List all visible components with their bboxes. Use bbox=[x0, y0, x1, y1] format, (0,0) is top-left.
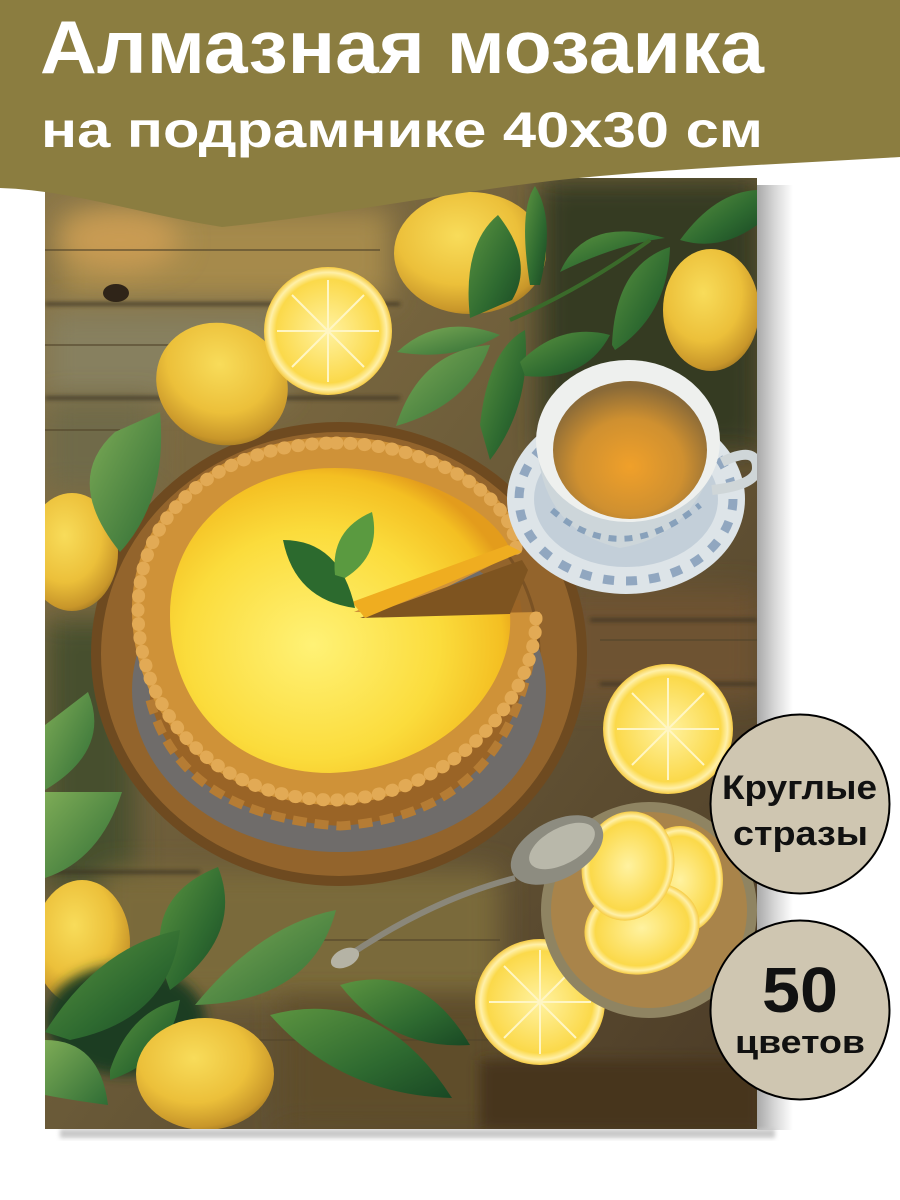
badge: 50 colours: цветов bbox=[735, 1024, 865, 1060]
lemon: left whole bbox=[156, 322, 288, 446]
lemon slice: top bbox=[264, 267, 392, 395]
lemon slice: bottom bbox=[475, 939, 605, 1065]
badge: round rhinestones bbox=[710, 714, 890, 894]
lemon: top right bbox=[663, 249, 759, 371]
bowl with lemon slices bbox=[541, 802, 757, 1018]
saucer bbox=[507, 436, 745, 594]
cut slice gap bbox=[360, 560, 528, 618]
dark foliage behind bottom sprig bbox=[45, 965, 205, 1075]
leaves: top sprig bbox=[396, 186, 757, 460]
badge: 50 colours bbox=[710, 920, 890, 1100]
cut slice bbox=[352, 545, 522, 618]
lemon: left edge bbox=[45, 493, 118, 611]
badge: round rhinestones: Круглые bbox=[722, 769, 877, 807]
wooden board bbox=[91, 422, 587, 886]
badge: round rhinestones: стразы bbox=[733, 815, 868, 853]
banner subtitle: на подрамнике 40х30 см bbox=[41, 102, 763, 158]
lemon: top centre bbox=[394, 192, 546, 314]
leaf: left of tart bbox=[90, 412, 161, 552]
plate bbox=[132, 571, 546, 852]
teacup bbox=[536, 360, 757, 548]
spoon bbox=[330, 815, 604, 968]
leaves: left edge bbox=[45, 692, 122, 878]
tart leaf garnish bbox=[283, 512, 374, 608]
painting: lemon tart on wooden table bbox=[26, 178, 760, 1130]
lemon filling bbox=[170, 468, 510, 773]
tart crust bbox=[132, 437, 540, 826]
banner title: Алмазная мозаика bbox=[40, 5, 765, 89]
lemon: bottom bbox=[136, 1018, 274, 1130]
canvas drop shadow bbox=[60, 185, 793, 1138]
badge: 50 colours: 50 bbox=[762, 954, 838, 1026]
top banner bbox=[0, 0, 900, 227]
lemon: lower left bbox=[45, 880, 130, 999]
lemon slice: right bbox=[603, 664, 733, 794]
leaves: bottom sprig bbox=[45, 867, 470, 1105]
wooden table background bbox=[45, 178, 760, 1130]
